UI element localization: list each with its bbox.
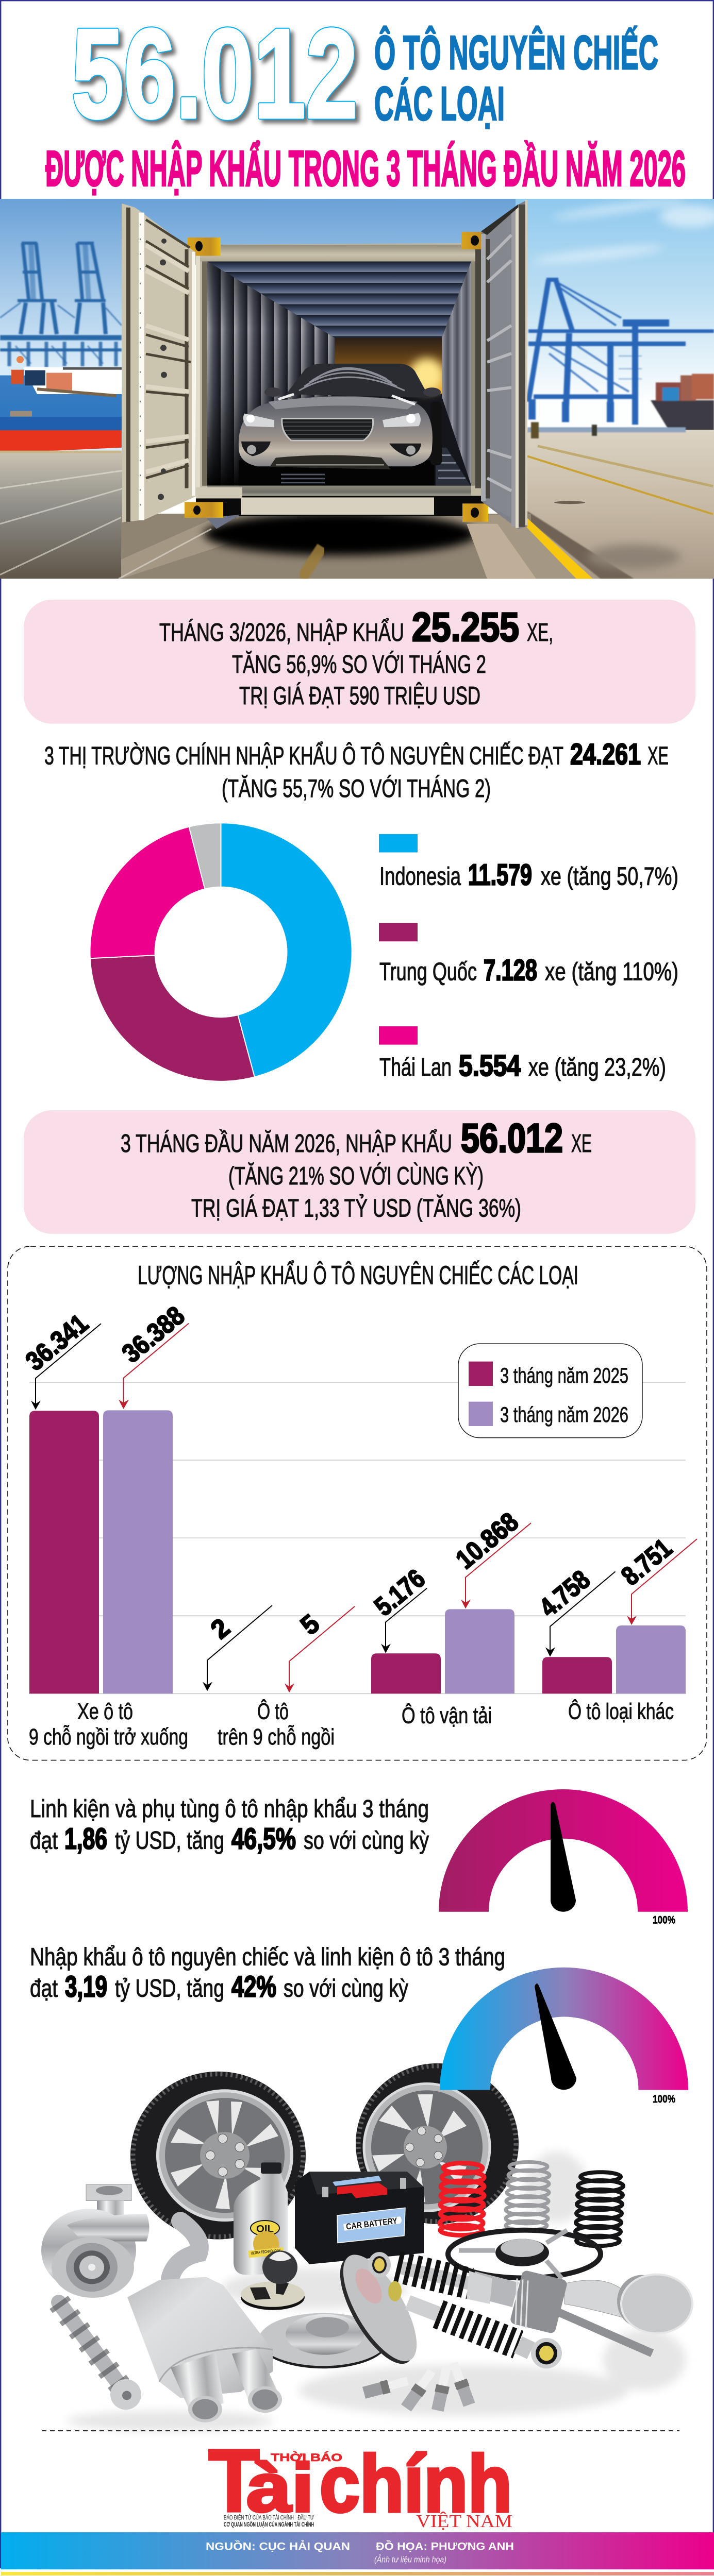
sky (0, 195, 714, 463)
text: quarter value: TRỊ GIÁ ĐẠT 1,33 TỶ USD (TĂNG 36%) (191, 1194, 521, 1222)
callout: 8.751 (616, 1533, 697, 1625)
left ground (0, 453, 124, 579)
legend: Indonesia (379, 834, 678, 892)
panel: March imports (24, 600, 695, 724)
logo strapline 1: BÁO ĐIỆN TỬ CỦA BÁO TÀI CHÍNH - ĐẦU TƯ (224, 2514, 314, 2521)
heading: three main markets (44, 738, 669, 803)
oil sublabel: ULTRA TECHNOLOGY (251, 2248, 281, 2256)
piston and rod (555, 2275, 692, 2353)
text: XE: XE, (527, 618, 553, 647)
source credit: NGUỒN: CỤC HẢI QUAN (206, 2540, 350, 2553)
image note: (Ảnh tư liệu minh họa) (374, 2554, 446, 2564)
gauge: auto parts (439, 1789, 688, 1926)
donut legend (379, 834, 678, 1082)
number: 25.255: 25.255 (412, 604, 519, 650)
number: 56.012: 56.012 (461, 1115, 563, 1161)
category label 1: Xe ô tô (77, 1699, 133, 1724)
wheel right (356, 2063, 519, 2224)
slice: Indonesia (221, 823, 352, 1077)
shock absorber upper (368, 2252, 568, 2334)
logo (208, 2431, 512, 2531)
text block: auto parts (30, 1795, 429, 1855)
logo T: T (208, 2431, 260, 2531)
logo Thời báo: THỜI BÁO (271, 2451, 342, 2464)
text block: cars and parts: 3,19 (65, 1971, 107, 2004)
title line 2: CÁC LOẠI (374, 77, 505, 130)
callout: 4.758: 4.758 (534, 1564, 595, 1622)
callout: 36.341: 36.341 (20, 1308, 94, 1376)
category label 1: 9 chỗ ngồi trở xuống (29, 1724, 188, 1750)
right ship (650, 373, 714, 430)
logo Việt Nam: VIỆT NAM (416, 2511, 512, 2531)
text block: auto parts: 1,86 (64, 1823, 107, 1855)
text block: auto parts: so với cùng kỳ (304, 1827, 429, 1854)
text: XE unit: XE (571, 1129, 592, 1158)
callout: 10.868: 10.868 (450, 1506, 524, 1574)
callout: 36.388 (116, 1300, 190, 1409)
text: XE label: XE (647, 741, 669, 770)
callout: 5.176: 5.176 (369, 1563, 430, 1621)
illustration: car parts (41, 2063, 692, 2431)
spring: red (440, 2163, 484, 2235)
needle (551, 1802, 576, 1912)
chart legend: 3 tháng năm 2025 (500, 1363, 628, 1387)
centre ground (119, 513, 593, 579)
spark plugs (362, 2360, 475, 2412)
panel: first quarter imports (24, 1110, 695, 1234)
legend: Thái Lan: xe (tăng 23,2%) (528, 1053, 666, 1081)
shock absorber lower (388, 2281, 562, 2368)
text block: auto parts: 46,5% (231, 1823, 296, 1855)
gauge: cars and parts (440, 1968, 688, 2105)
legend: Trung Quốc (379, 923, 678, 987)
text block: auto parts: Linh kiện và phụ tùng ô tô nhập khẩu 3 tháng (30, 1795, 429, 1823)
text block: cars and parts: 42% (231, 1971, 276, 2004)
callout: 2: 2 (205, 1613, 235, 1645)
wheel left (130, 2072, 306, 2239)
bars: Xe ô tô 9 chỗ trở xuống (29, 1410, 173, 1693)
text: March import volume: THÁNG 3/2026, NHẬP KHẨU (159, 618, 404, 647)
text: value: TRỊ GIÁ ĐẠT 590 TRIỆU USD (239, 682, 480, 710)
reflections (67, 2151, 686, 2431)
text block: cars and parts: so với cùng kỳ (284, 1975, 409, 2003)
container frame (196, 243, 485, 529)
callout: 5 (285, 1606, 355, 1692)
callout: 36.341 (20, 1308, 101, 1410)
category label 3: Ô tô vận tải (402, 1703, 492, 1728)
spring: black (575, 2172, 623, 2246)
donut chart: markets (90, 823, 352, 1081)
logo ài: ài (246, 2450, 314, 2526)
graphic credit: ĐỒ HỌA: PHƯƠNG ANH (376, 2540, 514, 2553)
right ground (527, 422, 714, 579)
slice: other (189, 823, 221, 889)
legend: Thái Lan: Thái Lan (379, 1053, 452, 1081)
title number: 56.012 (72, 2, 358, 145)
S pipe (170, 2221, 200, 2279)
footer band (1, 2532, 714, 2569)
turbocharger (41, 2184, 150, 2298)
camshaft (59, 2302, 141, 2410)
text block: cars and parts: Nhập khẩu ô tô nguyên chiếc và linh kiện ô tô 3 tháng (30, 1943, 505, 1971)
text block: cars and parts: đạt (30, 1975, 58, 2003)
legend: Trung Quốc: xe (tăng 110%) (545, 957, 678, 986)
category label 2: trên 9 chỗ ngồi (218, 1724, 335, 1750)
battery (295, 2172, 424, 2264)
bars: Ô tô loại khác (542, 1625, 686, 1693)
brake disc upright (326, 2244, 431, 2374)
left door (122, 204, 196, 522)
car (239, 364, 442, 487)
needle (535, 1984, 576, 2090)
callout: 10.868 (450, 1506, 531, 1608)
label 100%: 100% (653, 2092, 675, 2105)
left cranes (0, 243, 122, 367)
text block: auto parts: đạt (30, 1827, 58, 1854)
right door (481, 200, 527, 529)
logo chính: chính (320, 2439, 512, 2529)
category label 4: Ô tô loại khác (568, 1699, 674, 1724)
bars: Ô tô vận tải (371, 1609, 514, 1693)
callout: 4.758 (534, 1564, 616, 1657)
callout: 36.388: 36.388 (116, 1300, 190, 1368)
title (45, 2, 686, 196)
category label 2: Ô tô (257, 1699, 289, 1724)
brake disc flat (259, 2313, 388, 2368)
legend: Trung Quốc: Trung Quốc (379, 957, 477, 986)
callout: 5.176 (369, 1563, 430, 1653)
slice: Thái Lan (90, 827, 205, 958)
text: market growth: (TĂNG 55,7% SO VỚI THÁNG 2) (222, 774, 491, 803)
legend: Thái Lan: 5.554 (459, 1049, 521, 1082)
number: 24.261: 24.261 (570, 738, 641, 771)
hero illustration: car in container at port (0, 195, 714, 579)
legend: Indonesia: Indonesia (379, 862, 461, 891)
text: growth: TĂNG 56,9% SO VỚI THÁNG 2 (232, 650, 486, 679)
text: quarter volume: 3 THÁNG ĐẦU NĂM 2026, NHẬP KHẨU (121, 1129, 452, 1158)
right crane (528, 280, 714, 425)
panel: bar chart (8, 1246, 707, 1760)
left ship (0, 356, 122, 454)
category label 1 (29, 1699, 188, 1750)
oil bottle (234, 2162, 288, 2275)
callout: 8.751: 8.751 (616, 1533, 677, 1591)
legend: Thái Lan (379, 1026, 666, 1082)
steering wheel (448, 2230, 601, 2279)
oil label: OIL (256, 2224, 274, 2235)
battery: CAR BATTERY (345, 2216, 398, 2232)
category label 2 (218, 1699, 335, 1750)
container interior (207, 261, 471, 488)
legend: Indonesia: 11.579 (468, 859, 532, 892)
chart legend: 3 tháng năm 2026 (500, 1402, 628, 1427)
text block: cars and parts (30, 1943, 505, 2004)
corner blocks (185, 232, 488, 522)
label 100%: 100% (653, 1913, 675, 1926)
legend: Trung Quốc: 7.128 (484, 954, 537, 987)
text block: cars and parts: tỷ USD, tăng (115, 1975, 224, 2003)
text block: auto parts: tỷ USD, tăng (115, 1827, 224, 1854)
spring: silver (506, 2162, 550, 2230)
callout: 5: 5 (294, 1608, 325, 1640)
chart legend (458, 1344, 642, 1438)
text: quarter growth: (TĂNG 21% SO VỚI CÙNG KỲ) (228, 1161, 484, 1190)
title number: 56.012 (72, 2, 358, 145)
gear shifter (241, 2250, 305, 2310)
slice: Trung Quốc (90, 955, 255, 1081)
callout: 2 (203, 1605, 272, 1691)
muffler (127, 2277, 282, 2422)
logo strapline 2: CƠ QUAN NGÔN LUẬN CỦA NGÀNH TÀI CHÍNH (224, 2520, 314, 2528)
